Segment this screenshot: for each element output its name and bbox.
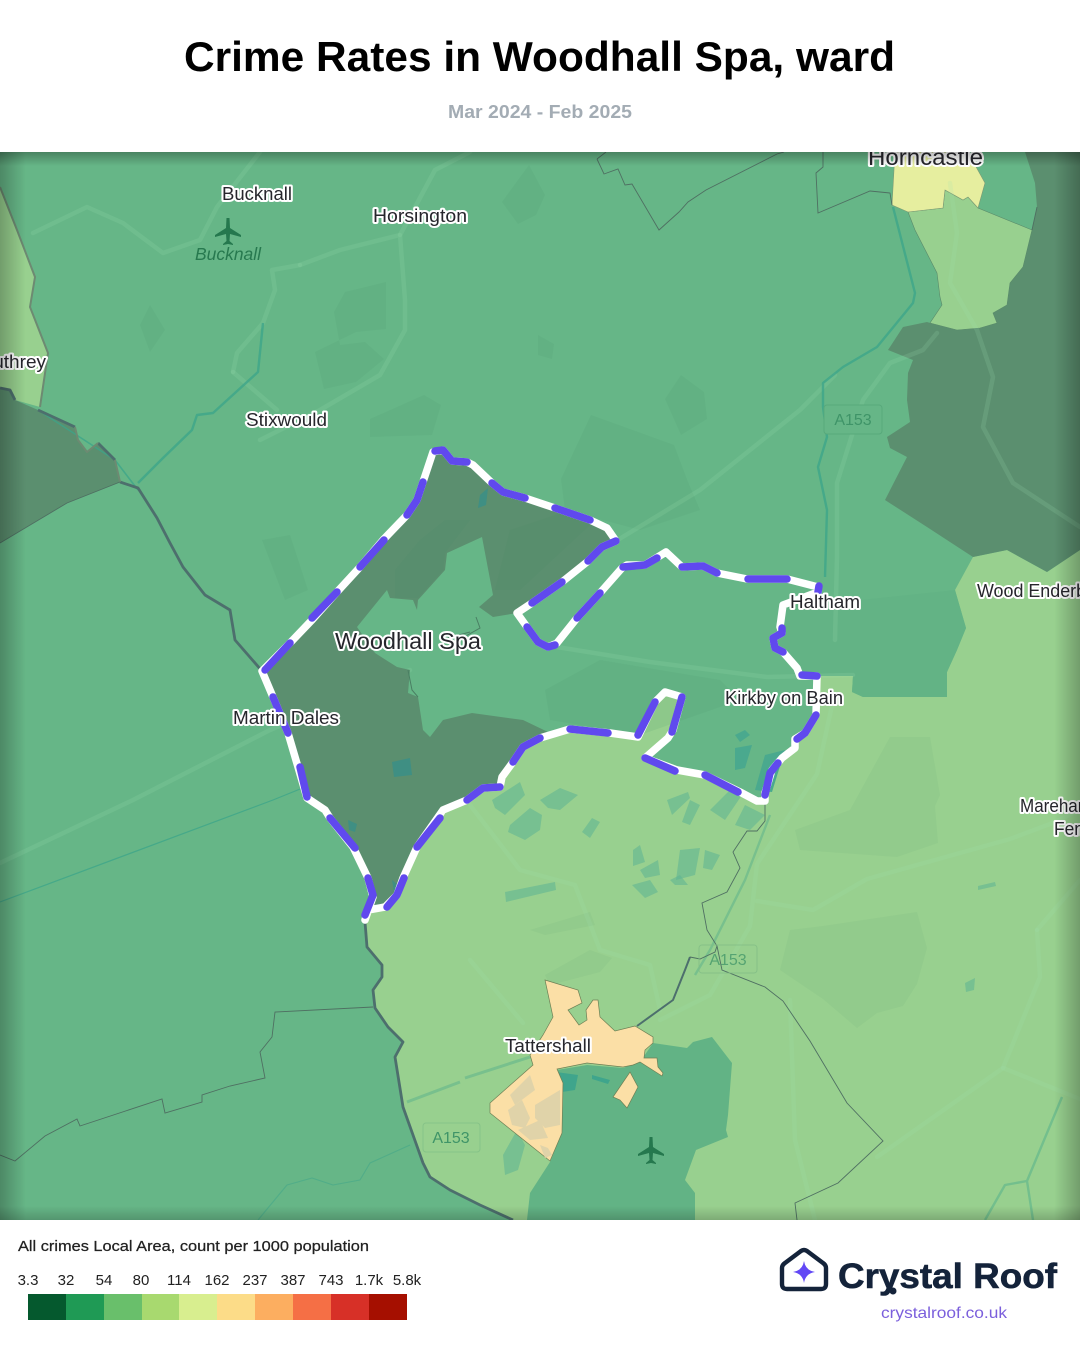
icon: house with star [782,1250,826,1289]
region: Woodhall Spa ward dark fill [262,450,616,910]
legend [18,1238,422,1320]
place labels: Tattershall [505,1036,591,1056]
legend values: 80 [133,1272,149,1289]
place labels: Haltham [790,592,860,612]
ward boundary: purple dashes [265,450,819,915]
parish boundaries [0,152,1037,1220]
ward interior details [348,488,488,892]
region: Horncastle light green [908,190,1032,330]
road shield: A153 centre [699,945,757,973]
legend caption: All crimes Local Area, count per 1000 population [18,1238,369,1255]
legend values: 1.7k [355,1272,384,1289]
legend values: 114 [167,1272,191,1289]
region: west dark green [0,388,120,543]
region: east-side dark green high-level area [885,152,1080,572]
ward boundary: white outline [262,450,818,920]
subtitle: date range: Mar 2024 - Feb 2025 [448,101,632,122]
river boundary north-west edge [0,187,120,482]
place labels: Kirkby on Bain [725,688,843,708]
place labels: Bucknall [222,184,292,204]
road shield: A153 south: A153 [432,1130,470,1147]
legend values: 3.3 [18,1272,38,1289]
roads [15,160,1080,1070]
region: west light green [0,187,48,407]
rivers and drains [0,207,1062,1220]
icon: Bucknall airfield [215,218,241,245]
icon: Tattershall airfield [638,1137,664,1164]
legend values: 5.8k [393,1272,422,1289]
legend values: 237 [242,1272,268,1289]
place labels: Woodhall Spa [335,628,481,654]
legend values: 162 [204,1272,230,1289]
Tattershall tan area [490,980,663,1161]
legend values: 32 [58,1272,74,1289]
choropleth map [0,144,1080,1220]
river boundary to Tattershall [637,957,690,1026]
road shield: A153 centre: A153 [709,952,747,969]
wordmark: Crystal Roof [838,1257,1057,1296]
title: Crime Rates in Woodhall Spa, ward [184,33,895,80]
Tattershall built-up grey patches [508,1075,560,1158]
place labels: Martin Dales [233,708,339,728]
region: Horncastle pale yellow [892,152,985,212]
place labels [0,144,1080,1056]
legend values [18,1272,422,1289]
road shield: A153 south [423,1123,480,1152]
wordmark y key detail [890,1288,896,1294]
map edge vignette [0,152,1080,1220]
region: light green south-east area [365,550,1080,1220]
legend values: 743 [318,1272,344,1289]
region: Tattershall south mid green [527,1037,732,1220]
url: crystalroof.co.uk [881,1305,1008,1322]
river boundary south [365,922,513,1220]
legend values: 54 [96,1272,112,1289]
road shield: A153 north [824,405,882,434]
place labels: Horncastle [868,144,983,170]
road shield: A153 north: A153 [834,412,872,429]
region: slightly deeper green east of ward [852,590,966,697]
legend colour scale [28,1294,407,1320]
river boundary west [0,388,262,671]
woodland patches [644,696,677,734]
logo: Crystal Roof [782,1250,1057,1322]
legend values: 387 [280,1272,306,1289]
lakes and sand pits south of ward [492,730,996,1175]
place labels: Horsington [373,206,467,226]
place labels: Stixwould [246,410,327,430]
label: Bucknall airfield: Bucknall [195,244,262,264]
